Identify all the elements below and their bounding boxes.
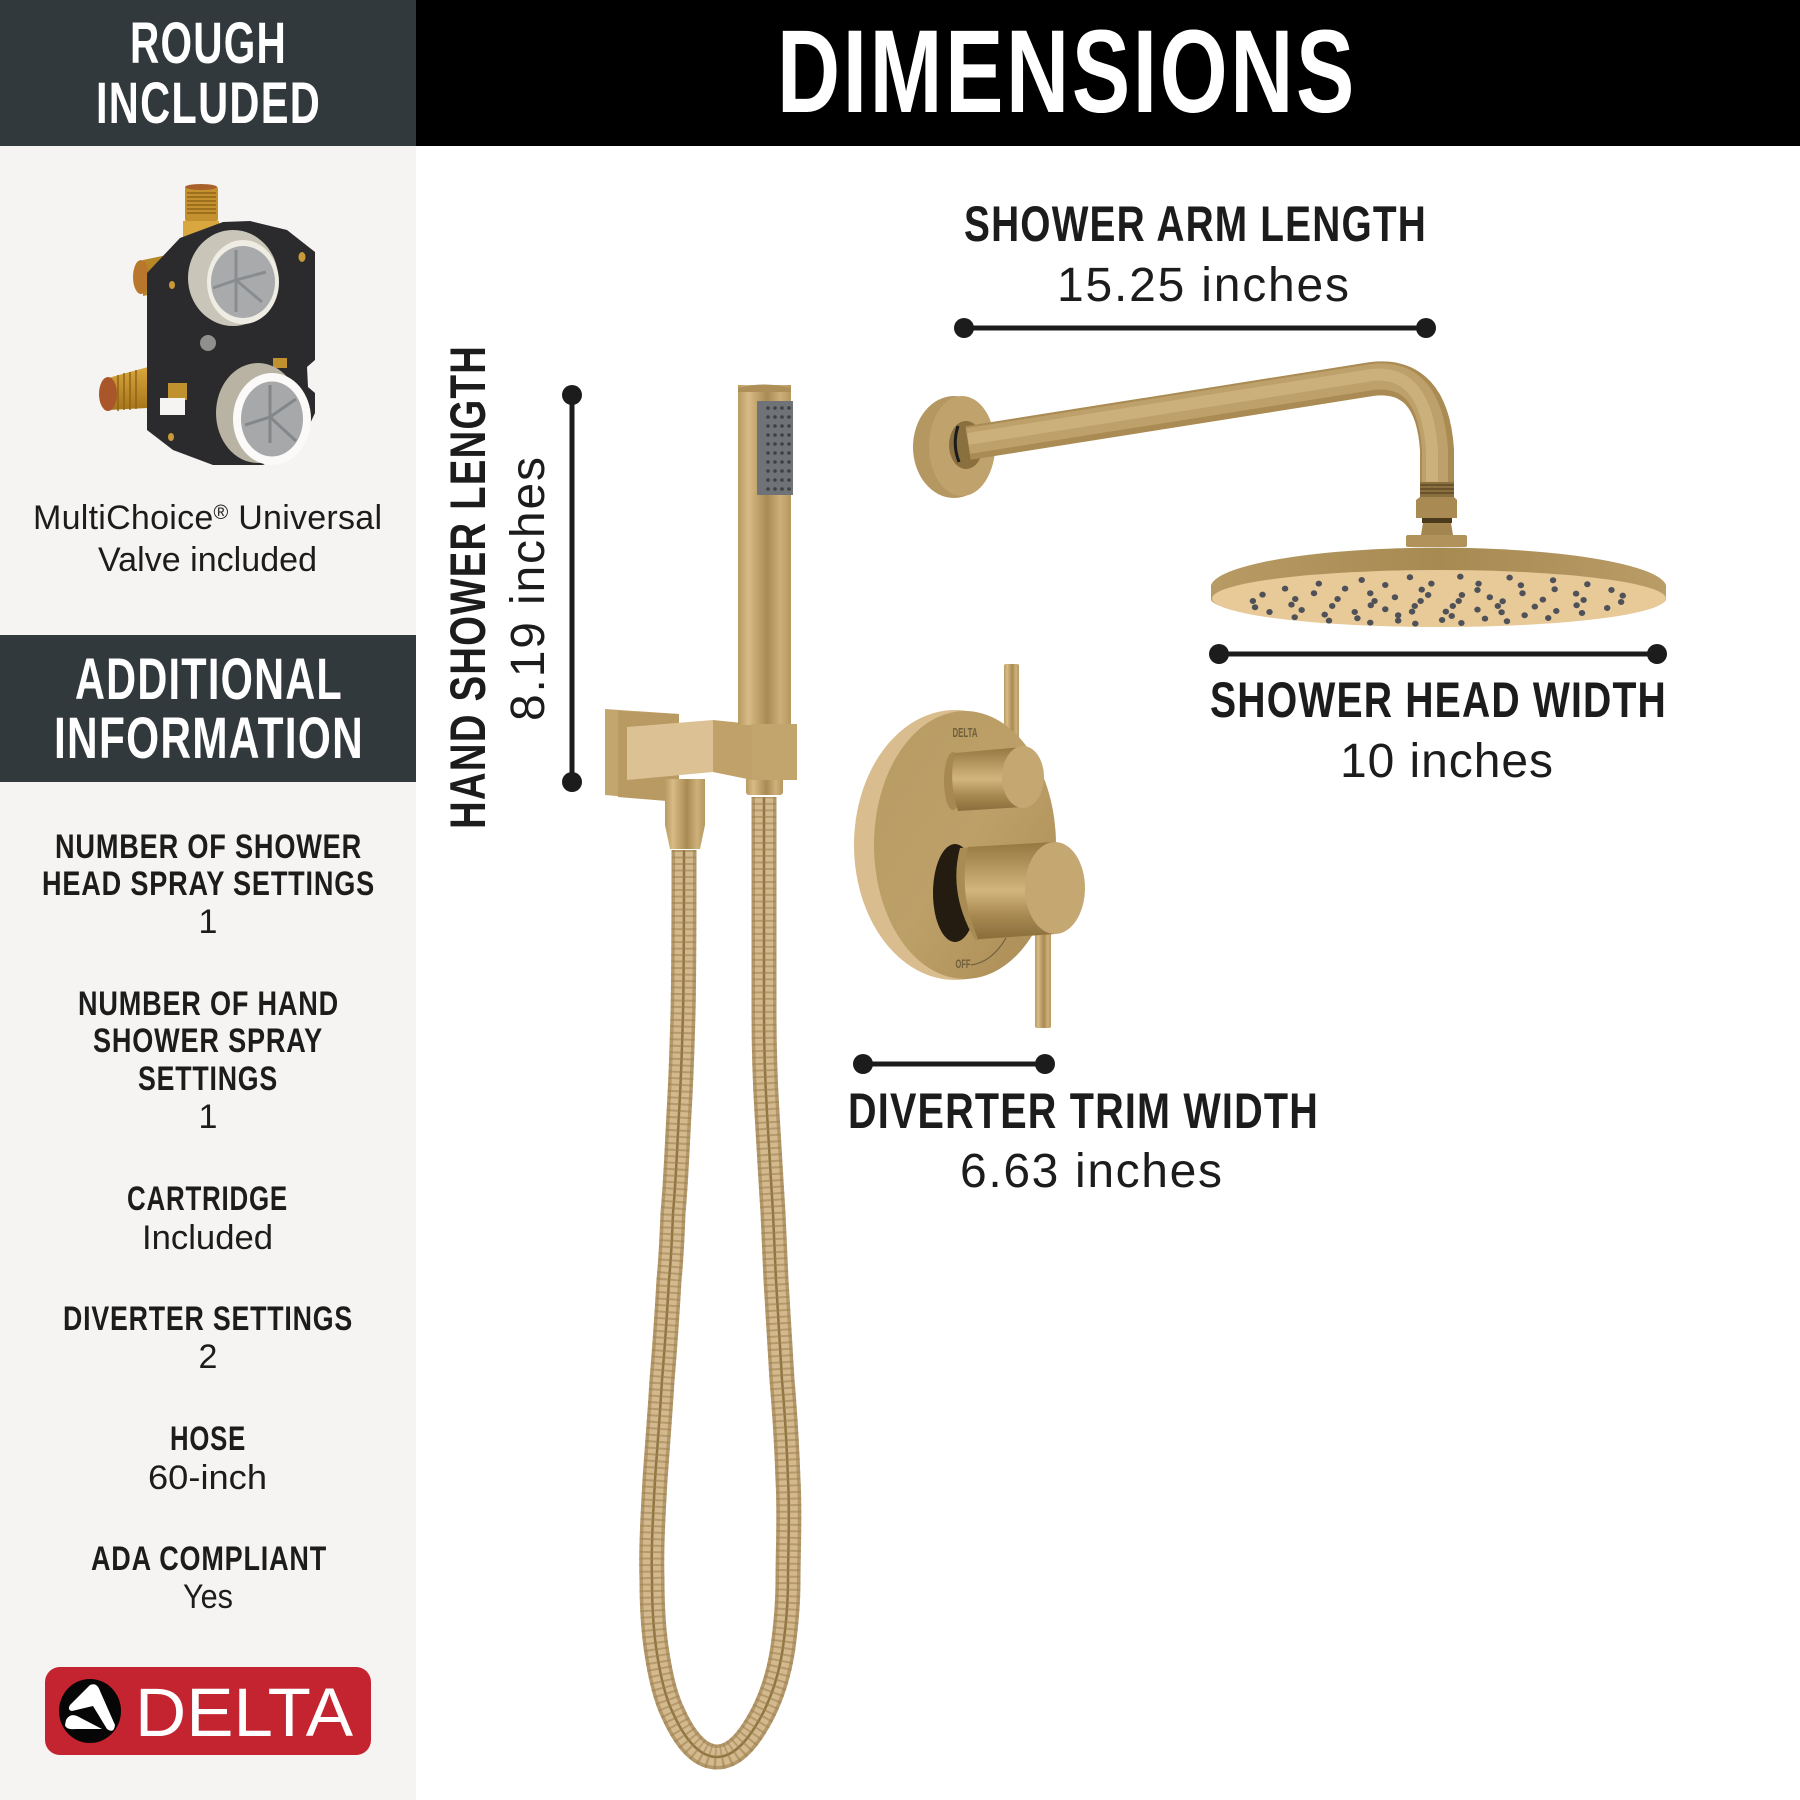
caption: MultiChoice valve [33,499,382,579]
spec: hand shower spray settings: SHOWER SPRAY [93,1022,323,1060]
header: dimensions: DIMENSIONS [777,6,1357,138]
spec: ADA compliant [91,1540,327,1616]
label: shower arm length [964,196,1427,312]
spec: diverter settings: DIVERTER SETTINGS [63,1300,353,1338]
label: hand shower length: 8.19 inches [502,457,555,721]
dimension line: shower head [1209,644,1667,664]
label: shower head width: SHOWER HEAD WIDTH [1210,672,1667,728]
label: hand shower length: HAND SHOWER LENGTH [440,345,496,829]
caption: MultiChoice valve: ® [213,502,228,524]
illustration: hand shower and wall bracket [605,384,797,849]
caption: MultiChoice valve: MultiChoice [33,499,213,537]
label: diverter trim width [848,1083,1319,1198]
label: diverter trim width: 6.63 inches [960,1145,1222,1198]
heading: additional information: ADDITIONAL [75,647,343,712]
label: shower head width [1210,672,1667,788]
spec: cartridge: Included [142,1219,273,1257]
spec: cartridge [127,1180,288,1257]
spec: shower head spray settings: HEAD SPRAY SETTINGS [42,865,375,903]
spec: diverter settings [63,1300,353,1376]
icon: MultiChoice valve [99,184,315,465]
illustration: diverter trim [854,664,1085,1028]
spec: ADA compliant: Yes [183,1578,233,1616]
dimension line: shower arm [954,318,1436,338]
label: hand shower length [440,345,555,829]
header: rough included: INCLUDED [96,71,321,136]
spec: diverter settings: 2 [199,1338,217,1376]
spec: hand shower spray settings: 1 [199,1098,217,1136]
heading: additional information: INFORMATION [54,706,364,771]
illustration: hand shower hose [652,797,789,1757]
spec: hose: HOSE [170,1420,246,1458]
label: diverter trim width: DIVERTER TRIM WIDTH [848,1083,1319,1139]
illustration: shower arm and rain head [913,375,1666,627]
left sidebar background [0,0,416,1800]
spec: hand shower spray settings: SETTINGS [138,1060,278,1098]
header: rough included [0,0,416,146]
spec: shower head spray settings: 1 [199,903,217,941]
spec: cartridge: CARTRIDGE [127,1180,288,1218]
spec: hose [148,1420,267,1497]
spec: hose: 60-inch [148,1459,267,1497]
heading: additional information [0,635,416,782]
caption: MultiChoice valve: Valve included [98,541,317,579]
label: shower arm length: SHOWER ARM LENGTH [964,196,1427,252]
spec: hand shower spray settings: NUMBER OF HAND [78,985,339,1023]
header: rough included: ROUGH [130,11,287,76]
label: shower arm length: 15.25 inches [1057,259,1349,312]
illustration: diverter trim: DELTA [952,725,978,740]
spec: ADA compliant: ADA COMPLIANT [91,1540,327,1578]
spec: shower head spray settings [42,828,375,941]
dimension line: hand shower [562,385,582,792]
illustration: diverter trim: OFF [956,957,970,971]
dimension line: diverter trim [853,1054,1055,1074]
caption: MultiChoice valve: Universal [228,499,382,537]
label: shower head width: 10 inches [1340,735,1553,788]
header: dimensions [416,0,1800,146]
logo: Delta [45,1667,371,1755]
spec: hand shower spray settings [78,985,339,1136]
spec: shower head spray settings: NUMBER OF SHOWER [55,828,362,866]
logo: Delta: DELTA [135,1674,353,1751]
